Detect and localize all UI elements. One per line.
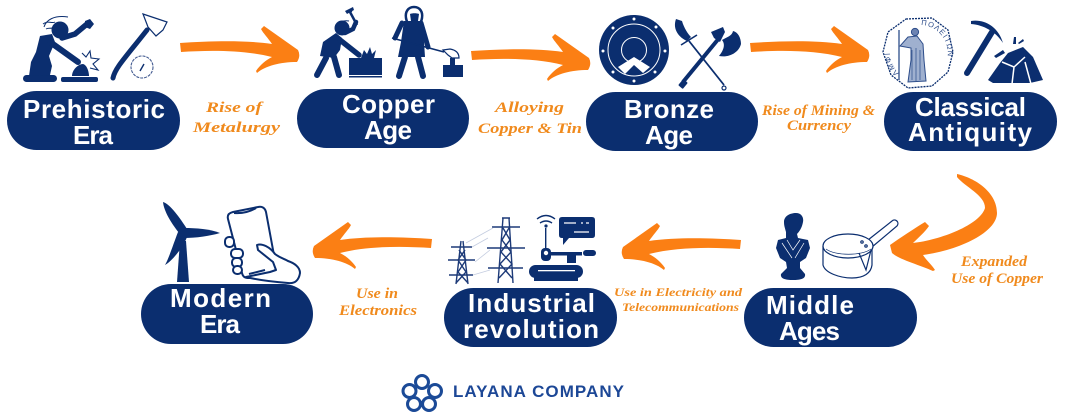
label pill: bronze age: Age: [645, 120, 693, 150]
caption: rise of mining and currency: [761, 103, 875, 134]
icon: ancient coin: [882, 17, 954, 89]
panel: copper age: [297, 7, 469, 148]
panel: industrial revolution: [444, 216, 617, 347]
label pill: prehistoric era: Era: [73, 120, 114, 150]
label pill: modern era: Era: [200, 309, 241, 339]
panel: bronze age: [586, 15, 758, 151]
label pill: copper age: [297, 89, 469, 148]
caption: use in electricity and telecommunications: [614, 285, 743, 314]
icon: pickaxe and ore: [967, 21, 1043, 84]
icon: round shield: [599, 15, 669, 85]
caption: alloying copper and tin: [478, 100, 582, 137]
panel: modern era: [141, 202, 313, 344]
label pill: middle ages: [744, 288, 917, 347]
caption: alloying copper and tin: Alloying: [494, 100, 565, 116]
caption: rise of mining and currency: Currency: [787, 118, 851, 134]
caption: rise of metallurgy: Metalurgy: [192, 120, 280, 136]
label pill: copper age: Copper: [342, 89, 435, 119]
arrow: middle ages to industrial: [622, 223, 741, 270]
label pill: prehistoric era: [7, 91, 180, 150]
label pill: industrial revolution: Industrial: [468, 288, 595, 318]
arrow: prehistoric to copper: [180, 26, 299, 73]
caption: rise of metallurgy: [192, 100, 280, 136]
label pill: middle ages: Ages: [779, 316, 840, 346]
icon: ancient coin: ΛΜΦΙ: [884, 54, 898, 76]
label pill: industrial revolution: [444, 288, 617, 347]
icon: stone axe and disc: [113, 14, 167, 78]
icon: telegraph and chat bubble: [529, 216, 596, 281]
logo: layana company: [403, 376, 625, 410]
caption: use in electricity and telecommunications: Telecommunications: [622, 300, 739, 314]
caption: use in electricity and telecommunications: Use in Electricity and: [614, 285, 743, 299]
label pill: classical antiquity: Antiquity: [908, 117, 1033, 147]
panel: middle ages: [744, 213, 917, 347]
icon: crossed sword and battle axe: [675, 19, 741, 90]
label pill: bronze age: [586, 92, 758, 151]
caption: expanded use of copper: [951, 254, 1043, 287]
panel: classical antiquity: [882, 17, 1057, 151]
icon: smith hammering on anvil: [317, 7, 382, 78]
label pill: copper age: Age: [364, 115, 412, 145]
label pill: modern era: Modern: [170, 283, 271, 313]
caption: use in electronics: [338, 286, 417, 319]
caption: alloying copper and tin: Copper & Tin: [478, 121, 582, 137]
label pill: classical antiquity: Classical: [915, 92, 1026, 122]
icon: worker with ladle: [392, 7, 463, 77]
icon: wind turbine: [163, 202, 220, 282]
caption: rise of metallurgy: Rise of: [205, 100, 265, 116]
icon: hand holding smartphone: [225, 207, 300, 283]
label pill: prehistoric era: Prehistoric: [23, 94, 165, 124]
icon: five ring logo mark: [403, 376, 442, 410]
arrow: bronze to classical: [750, 26, 869, 73]
icon: ancient coin: ΠΟΛΕΙΤΩΝ: [922, 20, 953, 56]
icon: power lines: [448, 218, 525, 284]
caption: use in electronics: Electronics: [338, 303, 417, 319]
label pill: bronze age: Bronze: [624, 94, 714, 124]
arrow: industrial to modern: [313, 222, 432, 269]
label pill: modern era: [141, 283, 313, 344]
caption: rise of mining and currency: Rise of Mining &: [761, 103, 875, 119]
company name: LAYANA COMPANY: [453, 382, 625, 401]
label pill: industrial revolution: revolution: [463, 314, 599, 344]
label pill: middle ages: Middle: [766, 290, 854, 320]
icon: saucepan: [823, 220, 898, 278]
label pill: classical antiquity: [884, 92, 1057, 151]
icon: classical bust: [776, 213, 810, 280]
caption: use in electronics: Use in: [356, 286, 398, 302]
icon: person striking rock: [23, 17, 99, 82]
arrow: classical to middle ages: [890, 174, 997, 271]
caption: expanded use of copper: Expanded: [960, 254, 1028, 270]
panel: prehistoric era: [7, 14, 180, 150]
arrow: copper to bronze: [471, 34, 590, 81]
caption: expanded use of copper: Use of Copper: [951, 271, 1043, 287]
